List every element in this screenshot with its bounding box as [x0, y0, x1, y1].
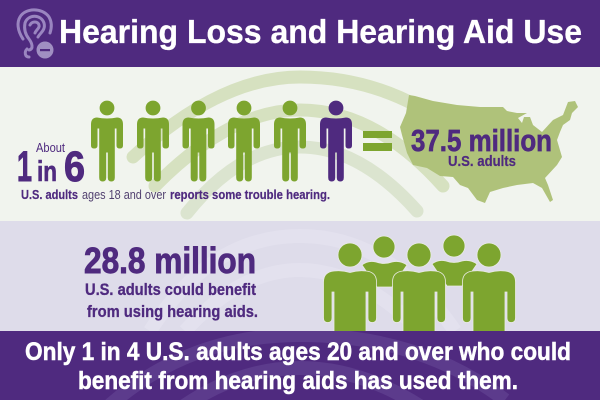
- statement text: benefit from hearing aids has used them.: [78, 367, 518, 395]
- stat: 28.8 million: from using hearing aids.: [87, 302, 258, 321]
- stat: 1 in 6: About: [36, 140, 65, 155]
- caption: ages 18 and over: [82, 187, 167, 202]
- row of people: [91, 101, 352, 182]
- stat: 28.8 million: U.S. adults could benefit: [85, 280, 256, 299]
- caption: [21, 187, 330, 202]
- stat: 1 in 6: 6: [64, 143, 85, 191]
- decorative lower arcs: [150, 236, 455, 331]
- header band: [0, 0, 600, 67]
- decorative banner arcs: [110, 335, 505, 400]
- icon: ear with minus: [18, 10, 54, 59]
- stat: 1 in 6: [17, 140, 85, 191]
- stat: 1 in 6: in: [37, 156, 57, 188]
- caption: U.S. adults: [21, 187, 78, 202]
- stat: 28.8 million: [84, 240, 258, 321]
- panel: could benefit: [0, 221, 600, 341]
- title: Hearing Loss and Hearing Aid Use: [59, 13, 582, 50]
- group of people: [324, 235, 516, 341]
- panel: one in six: [0, 67, 600, 221]
- stat: 28.8 million: 28.8 million: [84, 240, 256, 281]
- banner: bottom statement: [0, 331, 600, 400]
- stat: 1 in 6: 1: [17, 143, 32, 191]
- equals sign: [363, 131, 392, 151]
- decorative sound arcs: [133, 77, 478, 213]
- stat: 37.5 million: [411, 123, 552, 170]
- stat: 37.5 million: U.S. adults: [448, 153, 516, 170]
- map of the United States: [400, 95, 578, 203]
- caption: reports some trouble hearing.: [170, 187, 330, 202]
- statement text: [25, 338, 571, 395]
- stat: 37.5 million: 37.5 million: [411, 123, 552, 158]
